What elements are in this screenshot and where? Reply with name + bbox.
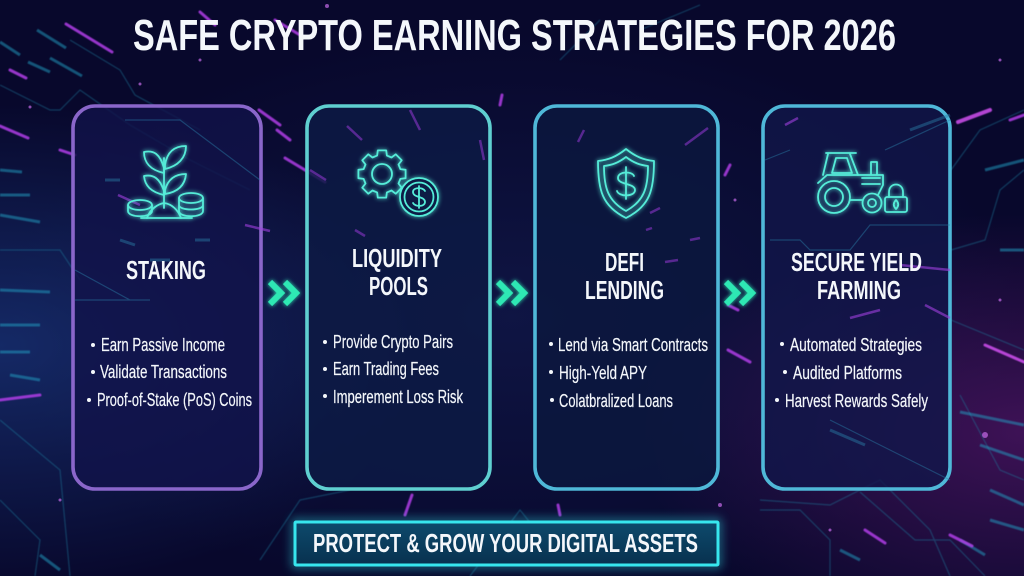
panel: secure yield farming bbox=[763, 106, 950, 489]
heading: staking: STAKING bbox=[126, 255, 206, 285]
arrow: lending to farming bbox=[726, 282, 752, 304]
heading: defi lending: DEFI bbox=[605, 247, 644, 277]
panel: defi lending bbox=[535, 106, 718, 489]
icon: tractor with padlock bbox=[818, 153, 907, 213]
panel: staking bbox=[73, 106, 270, 489]
heading: liquidity pools: LIQUIDITY bbox=[352, 243, 442, 273]
bullets: secure yield farming: Automated Strategies bbox=[790, 335, 922, 355]
bullets: staking: Earn Passive Income bbox=[101, 335, 225, 355]
icon: shield with dollar bbox=[598, 149, 654, 218]
panel: secure yield farming: FARMING bbox=[817, 275, 901, 305]
bullets: staking: Validate Transactions bbox=[100, 362, 227, 382]
bullets: secure yield farming bbox=[775, 335, 928, 411]
panel: liquidity pools bbox=[307, 106, 490, 489]
bullets: liquidity pools: Provide Crypto Pairs bbox=[333, 332, 453, 352]
bullets: defi lending: High-Yeld APY bbox=[559, 363, 647, 383]
bullets: defi lending: Colatbralized Loans bbox=[559, 391, 673, 411]
banner bbox=[295, 522, 718, 565]
bullets: staking bbox=[87, 335, 252, 410]
bullets: defi lending bbox=[549, 335, 708, 411]
icon: plant with coins bbox=[128, 146, 203, 218]
bullets: liquidity pools: Imperement Loss Risk bbox=[333, 387, 464, 407]
icon: gear and coin bbox=[358, 150, 438, 216]
bullets: secure yield farming: Harvest Rewards Safely bbox=[785, 391, 928, 411]
heading: secure yield farming: SECURE YIELD bbox=[791, 247, 922, 277]
banner text: PROTECT & GROW YOUR DIGITAL ASSETS bbox=[313, 528, 698, 558]
arrow: liquidity to lending bbox=[498, 282, 524, 304]
bullets: liquidity pools: Earn Trading Fees bbox=[333, 359, 439, 379]
panel: liquidity pools: POOLS bbox=[369, 271, 428, 301]
arrow: staking to liquidity bbox=[270, 282, 296, 304]
panel: defi lending: LENDING bbox=[585, 275, 664, 305]
bullets: defi lending: Lend via Smart Contracts bbox=[558, 335, 708, 355]
bullets: staking: Proof-of-Stake (PoS) Coins bbox=[97, 390, 252, 410]
bullets: secure yield farming: Audited Platforms bbox=[793, 363, 902, 383]
bullets: liquidity pools bbox=[323, 332, 464, 407]
